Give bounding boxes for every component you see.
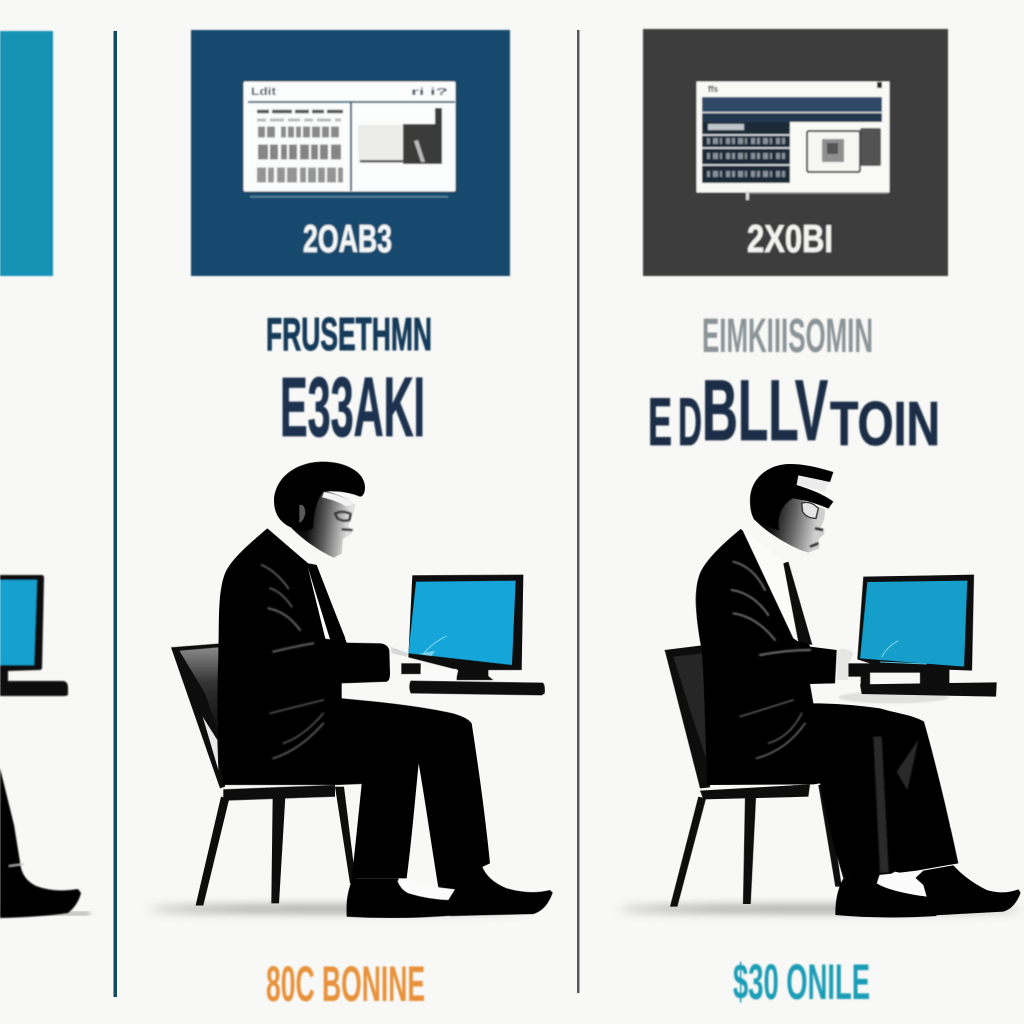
window footer line: [745, 192, 888, 194]
monitor: [837, 575, 997, 697]
shirt: [742, 528, 798, 642]
divider: blue rule: [114, 31, 117, 997]
window control label: ri i?: [411, 87, 448, 98]
modal image: [807, 128, 881, 172]
monitor screen: [0, 580, 37, 665]
cursor mark: [746, 191, 749, 200]
chair seat: [223, 785, 335, 801]
chair legs: [670, 797, 706, 907]
chair: [171, 643, 356, 905]
front shoe: [913, 865, 1021, 916]
glasses: [802, 502, 818, 518]
window title: Ldit: [251, 86, 276, 98]
window control: [877, 82, 882, 88]
shirt and tie: [308, 564, 345, 641]
figure: cropped man and monitor: [0, 575, 81, 918]
price label: orange: 80C BONINE: [266, 956, 425, 1012]
body: jacket and trousers: [217, 528, 490, 887]
rear shoe: [346, 878, 458, 918]
cap band: [797, 476, 828, 492]
sock: [877, 872, 927, 897]
screen glare: [882, 641, 898, 657]
chair back: [665, 645, 710, 788]
body: jacket and trousers: [696, 529, 958, 878]
tie: [783, 562, 812, 645]
window title: ffs: [708, 84, 718, 94]
trouser cuff highlight: [9, 864, 24, 866]
panel: cropped teal card: [0, 31, 53, 276]
figure: man at desk, blue column: [171, 462, 553, 918]
jacket fold highlights: [732, 562, 810, 758]
panel: blue card: [191, 30, 510, 276]
divider: grey rule: [577, 30, 580, 993]
desk: [409, 681, 545, 695]
stand: [456, 667, 493, 680]
ground shadow: blue column: [150, 906, 530, 912]
rear shoe: [835, 873, 937, 917]
heading: charcoal column large: TOIN: [830, 390, 940, 459]
text: E33AKI: [280, 360, 425, 454]
ground shadow: charcoal column: [620, 906, 1020, 912]
heading: charcoal column large: E: [648, 384, 672, 460]
chair back: [171, 643, 225, 788]
card code: 2X0BI: [747, 218, 833, 261]
hair: [274, 462, 365, 531]
trouser and shoe: [0, 768, 81, 918]
chair legs: [196, 797, 229, 905]
hand: [391, 647, 408, 657]
ear: [299, 505, 305, 523]
forehead highlight: [322, 492, 354, 507]
hair and cap: [750, 464, 833, 531]
heading: blue column small: FRUSETHMN: [266, 308, 432, 360]
mouth shading: [810, 528, 823, 547]
white box: [421, 669, 457, 680]
blurred table: [257, 112, 343, 175]
desk reflection: [838, 691, 948, 703]
hand: [837, 649, 853, 680]
heading: charcoal column small: EIMKIIISOMIN: [702, 310, 873, 363]
chair seat: [700, 784, 810, 799]
keyboard block: [848, 663, 927, 685]
screenshot window: [243, 81, 456, 192]
heading: charcoal column large: D: [678, 384, 702, 460]
stand: [920, 668, 949, 684]
monitor: [0, 575, 44, 682]
jacket fold highlights: [262, 565, 323, 758]
screenshot window: [696, 81, 890, 193]
card code: 2OAB3: [303, 218, 392, 261]
price label: teal: $30 ONILE: [733, 954, 870, 1010]
ground shadow: cropped figure: [0, 912, 90, 915]
front shoe: [438, 865, 553, 916]
screen: [860, 581, 967, 667]
chair: [665, 645, 842, 907]
sock: [397, 879, 455, 900]
figure: man at desk, charcoal column: [665, 464, 1021, 917]
screen: [408, 581, 516, 665]
monitor: [391, 575, 545, 695]
trouser highlights: [873, 737, 918, 873]
window shadow line: [250, 196, 448, 198]
face: [292, 491, 355, 558]
data table: [702, 122, 790, 183]
black block: [401, 663, 421, 674]
screen glare: [423, 636, 447, 654]
face: [753, 497, 825, 553]
heading: charcoal column large: BLLV: [702, 363, 828, 459]
desk: [860, 682, 997, 697]
brow, eye and mouth shading: [335, 512, 353, 530]
desk: [0, 681, 68, 696]
preview image: [358, 108, 442, 164]
panel: charcoal card: [643, 29, 948, 276]
